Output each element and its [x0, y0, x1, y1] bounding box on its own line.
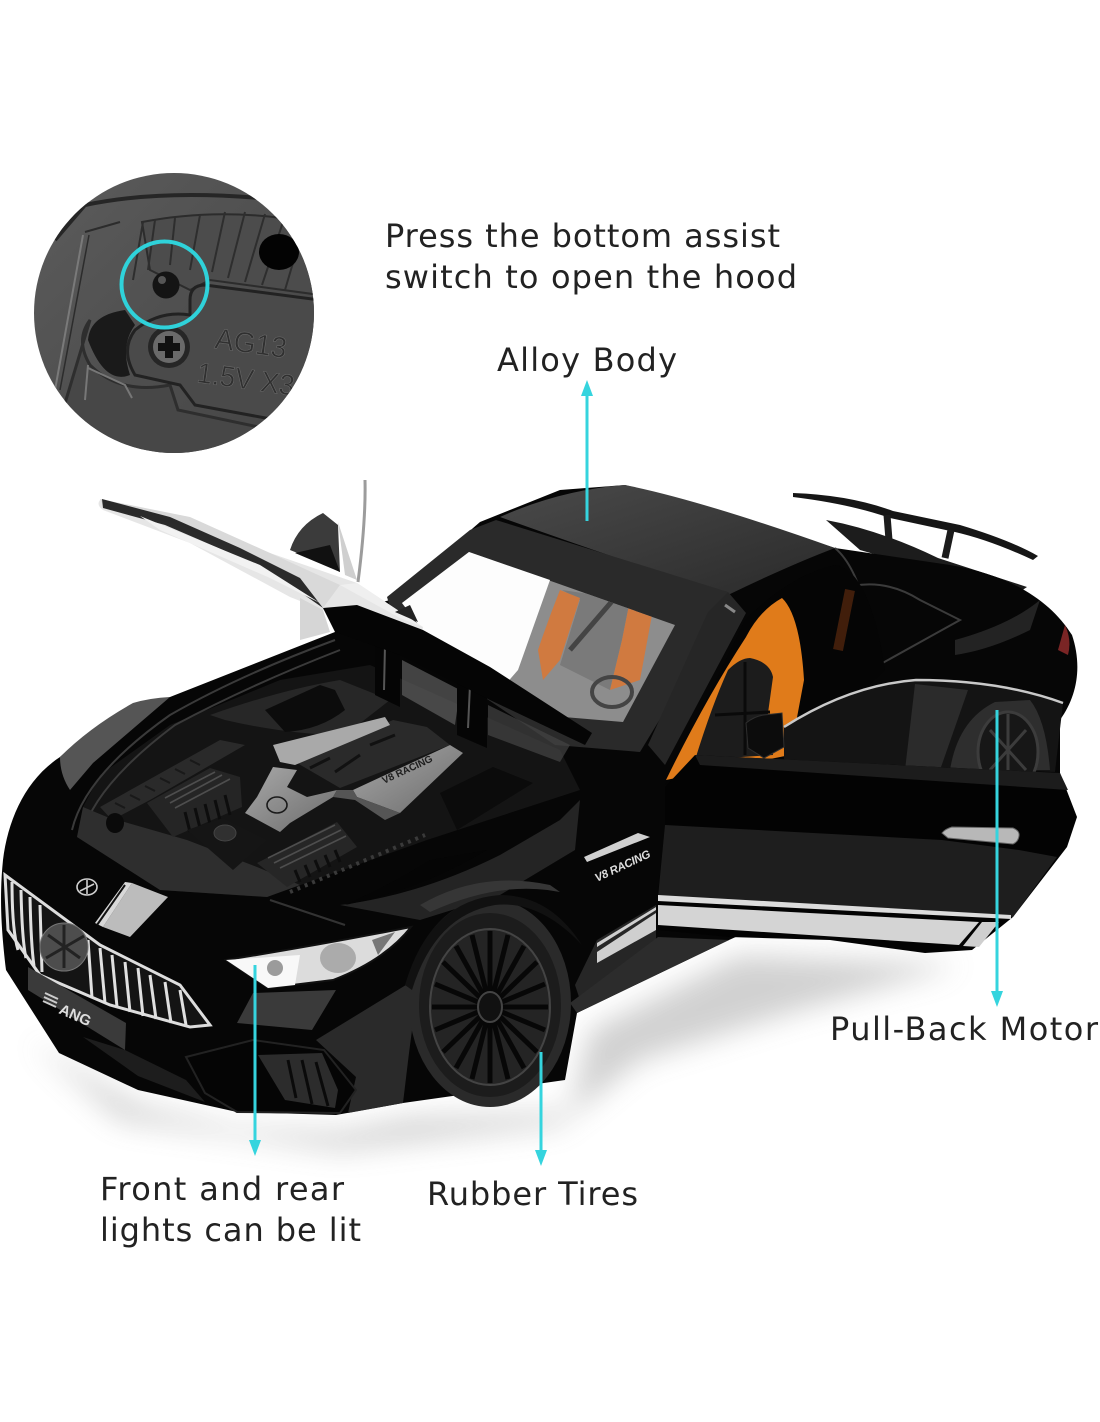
- icon: screw: [148, 326, 190, 368]
- lower grille slats: [83, 1037, 205, 1102]
- fender badge text: [584, 833, 653, 885]
- door window: [784, 680, 1063, 772]
- callout ring: hood switch highlight: [122, 242, 208, 328]
- icon: hood switch knob: [152, 272, 180, 298]
- mirror: [746, 713, 784, 758]
- engine cover logos: [267, 754, 435, 813]
- front lower panel: [316, 977, 419, 1113]
- rear wheel through window: [950, 700, 1050, 792]
- grille emblem: [40, 923, 88, 971]
- door opening interior: [665, 565, 885, 785]
- roof: [500, 485, 835, 595]
- emblem on hood: [77, 879, 97, 895]
- door handle: [942, 827, 1019, 844]
- sill: [570, 937, 729, 1013]
- open hood: [99, 499, 592, 745]
- reservoir tray: [210, 680, 390, 735]
- door stripe: [658, 895, 1011, 919]
- matte front fender: [60, 697, 170, 790]
- label: alloy body: Alloy Body: [497, 341, 677, 379]
- car body: [1, 485, 1077, 1115]
- fender badge text: V8 RACING: [593, 848, 653, 885]
- door panel: [658, 755, 1077, 953]
- arrow: lights: [249, 965, 261, 1156]
- car: [1, 480, 1077, 1115]
- arrow: rubber tires: [535, 1052, 547, 1166]
- label: hood switch: [385, 217, 797, 296]
- front plate: [28, 967, 126, 1050]
- rear quarter window outline: [835, 548, 960, 670]
- windshield: [402, 552, 675, 722]
- silver hood stripe: [95, 882, 168, 937]
- orange seat: [666, 590, 850, 780]
- front wheel arch: [405, 895, 582, 990]
- shadows: [30, 955, 960, 1150]
- rear haunch highlights: [955, 600, 1040, 655]
- engine cover logos: V8 RACING: [381, 754, 435, 787]
- back wall reflections: [402, 660, 460, 725]
- bay back wall ribs: [100, 740, 245, 820]
- engine centre dark: [297, 720, 450, 788]
- bay rim highlights: [72, 640, 340, 835]
- windshield frame: [387, 520, 728, 752]
- engine bay: [72, 640, 580, 897]
- battery marking text: AG13: [213, 323, 289, 365]
- label: lights: Front and rear: [100, 1170, 345, 1208]
- open far door: [290, 480, 365, 582]
- A pillar: [648, 592, 746, 765]
- battery marking text: [198, 329, 294, 396]
- hood body highlights: [270, 900, 345, 925]
- battery marking text: 1.5V X3: [195, 357, 297, 403]
- lower intake: [186, 1040, 356, 1113]
- label: pull-back motor: Pull-Back Motor: [830, 1010, 1099, 1048]
- label: lights: [100, 1170, 361, 1249]
- grille: [5, 875, 210, 1027]
- label: lights: lights can be lit: [100, 1211, 361, 1249]
- intake blocks: [147, 768, 242, 837]
- label: hood switch: Press the bottom assist: [385, 217, 780, 255]
- inset photo: hood assist switch: [30, 170, 320, 470]
- bay front lip: [77, 807, 300, 897]
- front wheel: [409, 899, 571, 1107]
- hood struts: [375, 633, 487, 748]
- label: hood switch: switch to open the hood: [385, 258, 797, 296]
- fender lower panel and stripe: [575, 905, 656, 1000]
- arrow: alloy body: [581, 380, 593, 521]
- engine cover: [273, 717, 390, 765]
- seat seen through windshield: [538, 590, 652, 707]
- front plate: ANG: [56, 1001, 94, 1030]
- rear spoiler: [793, 493, 1038, 595]
- arrow: pull-back motor: [991, 710, 1003, 1007]
- hole: [259, 234, 299, 270]
- label: rubber tires: Rubber Tires: [427, 1175, 638, 1213]
- headlight: [226, 927, 411, 988]
